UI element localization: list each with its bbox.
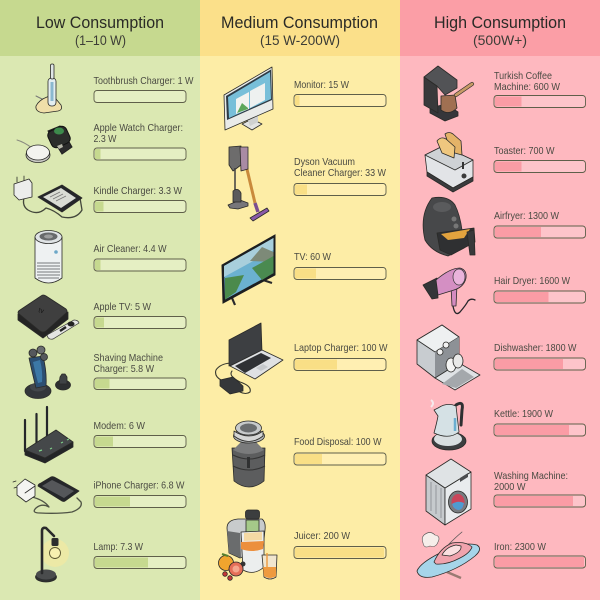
icon: apple watch charger (17, 125, 72, 162)
bar: toothbrush charger (94, 90, 186, 102)
text: shaving machine: Shaving Machine (94, 352, 163, 364)
text: iron: Iron: 2300 W (494, 541, 546, 553)
bar: iron (494, 556, 586, 568)
icon: apple tv: tv (37, 307, 45, 315)
text: dyson vacuum (294, 156, 386, 179)
text: apple tv: Apple TV: 5 W (94, 301, 151, 313)
header: medium consumption: Medium Consumption (221, 13, 378, 32)
text: apple watch charger: Apple Watch Charger: (94, 122, 183, 134)
bar: apple tv (94, 316, 186, 328)
text: juicer: Juicer: 200 W (294, 530, 350, 542)
icon: monitor (224, 67, 273, 130)
text: monitor: Monitor: 15 W (294, 79, 349, 91)
icon: hair dryer (423, 268, 475, 314)
text: food disposal: Food Disposal: 100 W (294, 436, 382, 448)
text: iphone charger: iPhone Charger: 6.8 W (94, 480, 185, 492)
icon: apple tv (18, 295, 79, 339)
header: medium consumption (200, 0, 400, 56)
icon: iphone charger (13, 477, 81, 513)
bar: iphone charger (94, 496, 186, 508)
icon: washing machine (426, 459, 471, 525)
icon: toothbrush charger (36, 64, 62, 113)
icon: kettle (431, 400, 466, 450)
icon: iron (417, 532, 480, 578)
bar: monitor (294, 94, 386, 106)
text: washing machine: 2000 W (494, 481, 526, 493)
bar: shaving machine (94, 378, 186, 390)
icon: lamp (36, 528, 69, 582)
text: modem: Modem: 6 W (94, 420, 145, 432)
header: low consumption (0, 0, 200, 56)
bar: laptop charger (294, 358, 386, 370)
text: tv: TV: 60 W (294, 251, 331, 263)
header: high consumption: High Consumption (434, 13, 566, 32)
bar: kindle charger (94, 200, 186, 212)
text: dyson vacuum: Dyson Vacuum (294, 156, 355, 168)
icon: food disposal (232, 421, 265, 487)
panel: high consumption (400, 0, 600, 600)
header: high consumption: (500W+) (473, 32, 527, 48)
header: medium consumption: (15 W-200W) (260, 32, 340, 48)
bar: food disposal (294, 453, 386, 465)
text: laptop charger: Laptop Charger: 100 W (294, 342, 388, 354)
bar: washing machine (494, 495, 586, 507)
bar: modem (94, 436, 186, 448)
text: kettle: Kettle: 1900 W (494, 408, 553, 420)
bar: hair dryer (494, 291, 586, 303)
icon: dyson vacuum (228, 146, 269, 221)
text: air cleaner: Air Cleaner: 4.4 W (94, 243, 167, 255)
text: kindle charger: Kindle Charger: 3.3 W (94, 185, 182, 197)
text: lamp: Lamp: 7.3 W (94, 541, 143, 553)
bar: apple watch charger (94, 148, 186, 160)
icon: air cleaner (35, 230, 62, 283)
bar: kettle (494, 424, 586, 436)
text: turkish coffee machine: Turkish Coffee (494, 70, 552, 82)
icon: juicer (218, 510, 277, 580)
text: shaving machine (94, 352, 163, 375)
icon: tv (222, 235, 275, 305)
icon: turkish coffee machine (424, 66, 472, 121)
bar: toaster (494, 160, 586, 172)
bar: air cleaner (94, 259, 186, 271)
text: washing machine: Washing Machine: (494, 470, 568, 482)
text: dyson vacuum: Cleaner Charger: 33 W (294, 167, 386, 179)
panel: low consumption (0, 0, 200, 600)
icon: laptop charger (216, 323, 283, 394)
text: apple watch charger (94, 122, 183, 145)
icon: kindle charger (14, 176, 82, 218)
bar: dishwasher (494, 358, 586, 370)
text: turkish coffee machine: Machine: 600 W (494, 81, 560, 93)
text: toothbrush charger: Toothbrush Charger: 1 W (94, 75, 194, 87)
text: dishwasher: Dishwasher: 1800 W (494, 342, 577, 354)
text: turkish coffee machine (494, 70, 560, 93)
bar: tv (294, 268, 386, 280)
bar: turkish coffee machine (494, 96, 586, 108)
text: toaster: Toaster: 700 W (494, 145, 555, 157)
text: washing machine (494, 470, 568, 493)
bar: airfryer (494, 226, 586, 238)
icon: shaving machine (25, 346, 70, 398)
icon: modem (25, 407, 73, 463)
header: high consumption (400, 0, 600, 56)
panel: medium consumption (200, 0, 400, 600)
bar: juicer (294, 546, 386, 558)
header: low consumption: Low Consumption (36, 13, 164, 32)
icon: toaster (425, 132, 473, 192)
header: low consumption: (1–10 W) (75, 32, 126, 48)
icon: dishwasher (417, 325, 480, 390)
bar: dyson vacuum (294, 184, 386, 196)
text: shaving machine: Charger: 5.8 W (94, 363, 154, 375)
text: hair dryer: Hair Dryer: 1600 W (494, 275, 570, 287)
bar: lamp (94, 556, 186, 568)
text: apple watch charger: 2.3 W (94, 133, 117, 145)
text: airfryer: Airfryer: 1300 W (494, 210, 559, 222)
icon: airfryer (423, 197, 475, 256)
